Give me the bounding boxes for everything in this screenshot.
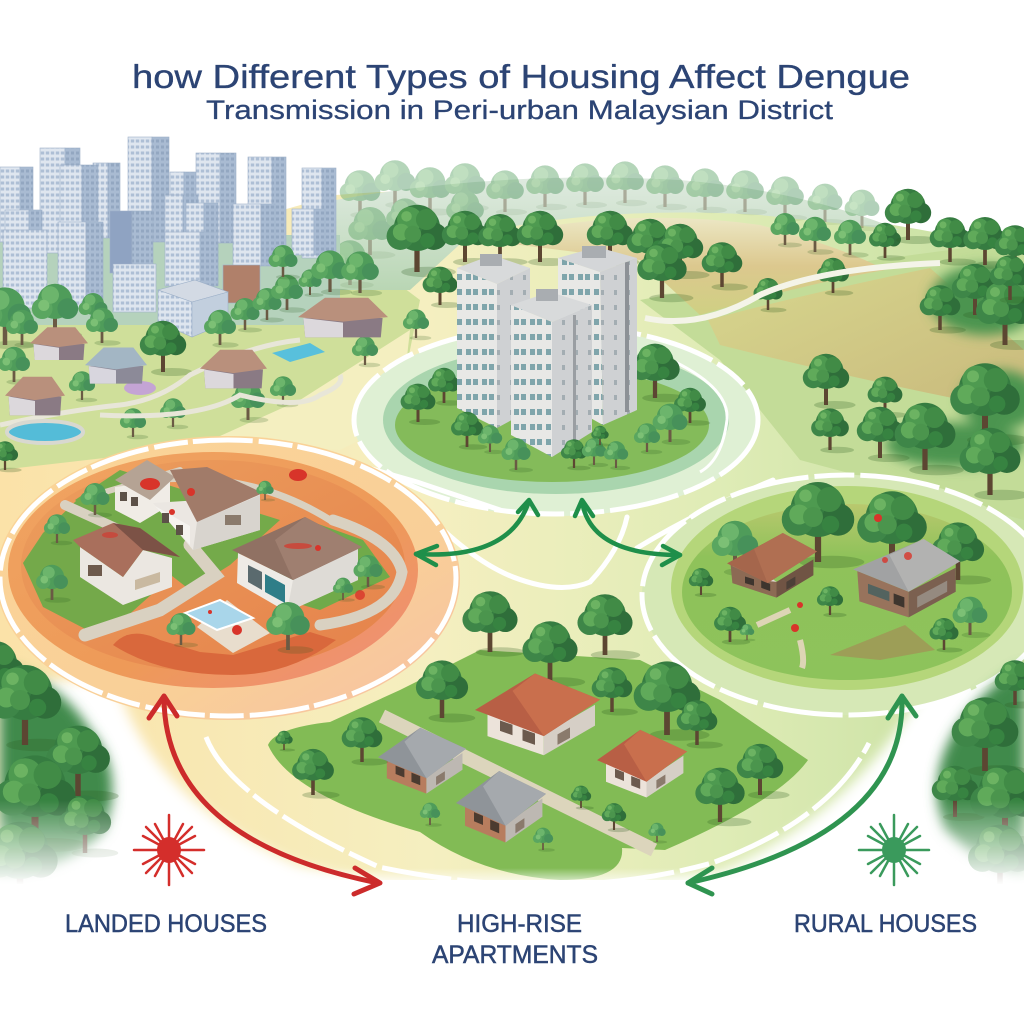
city skyline	[0, 137, 340, 337]
lawn island	[395, 368, 709, 482]
landscape base	[0, 189, 1024, 880]
lawn disc	[682, 504, 1012, 680]
panel: high-rise apartments zone	[354, 246, 758, 516]
house: rear large villa	[115, 460, 263, 550]
trees: suburb woodland	[0, 245, 431, 472]
title: how Different Types of Housing Affect Dengue	[132, 58, 910, 95]
lawn patches	[23, 470, 390, 633]
trees: mid forest behind towers	[387, 205, 748, 308]
garden plot	[830, 625, 935, 660]
arrow: apartments to rural, upper green	[575, 500, 680, 565]
label: landed houses: LANDED HOUSES	[65, 910, 267, 938]
houses	[378, 673, 687, 842]
label: high-rise apartments: APARTMENTS	[432, 941, 598, 969]
white ring	[642, 475, 1024, 715]
front row towers	[3, 222, 260, 337]
icon: green mosquito burst	[859, 815, 929, 885]
bottom white fade	[0, 800, 1024, 1024]
white surround at lower corners	[0, 680, 1024, 900]
panel: rural houses zone	[642, 475, 1024, 715]
white dashed ring	[0, 440, 456, 716]
foliage mass: left bottom woodland	[0, 665, 112, 880]
back row towers	[0, 137, 336, 258]
trees front	[275, 717, 790, 852]
driveways	[65, 470, 402, 635]
label: high-rise apartments: HIGH-RISE	[457, 910, 582, 938]
road	[382, 716, 654, 850]
icon: red mosquito burst	[134, 815, 204, 885]
outer peach wash	[0, 436, 460, 720]
foliage mass: right bottom woodland	[937, 665, 1024, 880]
meadow: right field	[708, 268, 1024, 412]
island lawn	[268, 650, 808, 880]
haze: distant forest mass	[336, 178, 900, 290]
panel: central neighbourhood island	[206, 591, 869, 885]
meadow: far field	[480, 218, 885, 315]
label: rural houses: RURAL HOUSES	[794, 910, 977, 938]
pool	[185, 600, 270, 653]
orange ring	[8, 452, 418, 688]
road: curving path through field	[645, 263, 940, 321]
outer lawn rim	[671, 486, 1023, 690]
white road lines between zones	[340, 460, 773, 587]
arrow: landed to apartments, upper green	[416, 500, 538, 565]
trees: hazy distant forest	[330, 160, 882, 288]
trees: left bottom woodland	[0, 641, 119, 912]
trees: right bottom woodland	[932, 660, 1024, 900]
subtitle: Transmission in Peri-urban Malaysian District	[206, 95, 834, 125]
trees back	[689, 482, 991, 597]
arrow: landed to apartments, red	[149, 696, 380, 894]
zone rings	[354, 326, 758, 516]
foliage mass: right forest	[885, 265, 1024, 467]
trees behind towers	[401, 344, 710, 445]
bare soil patch	[21, 460, 405, 672]
arrow: rural to apartments, green	[688, 696, 916, 894]
trees	[36, 481, 385, 654]
panel: landed houses zone	[0, 436, 460, 720]
pale green wash	[642, 475, 1024, 715]
path	[757, 610, 803, 668]
middle row towers	[5, 165, 325, 285]
trees in front of towers	[451, 412, 662, 472]
red infection marks	[791, 514, 912, 632]
house: right villa	[232, 517, 362, 612]
suburb houses	[5, 298, 388, 415]
suburb roads and pools	[0, 340, 341, 443]
house: left villa	[73, 523, 180, 605]
trees: right tree line	[754, 189, 1024, 500]
houses	[727, 533, 960, 617]
red infection marks	[102, 469, 365, 635]
hazy green behind city	[0, 235, 340, 325]
trees front	[714, 586, 990, 652]
ring outline	[206, 737, 869, 885]
trees back	[416, 591, 723, 748]
apartment towers	[457, 246, 637, 457]
